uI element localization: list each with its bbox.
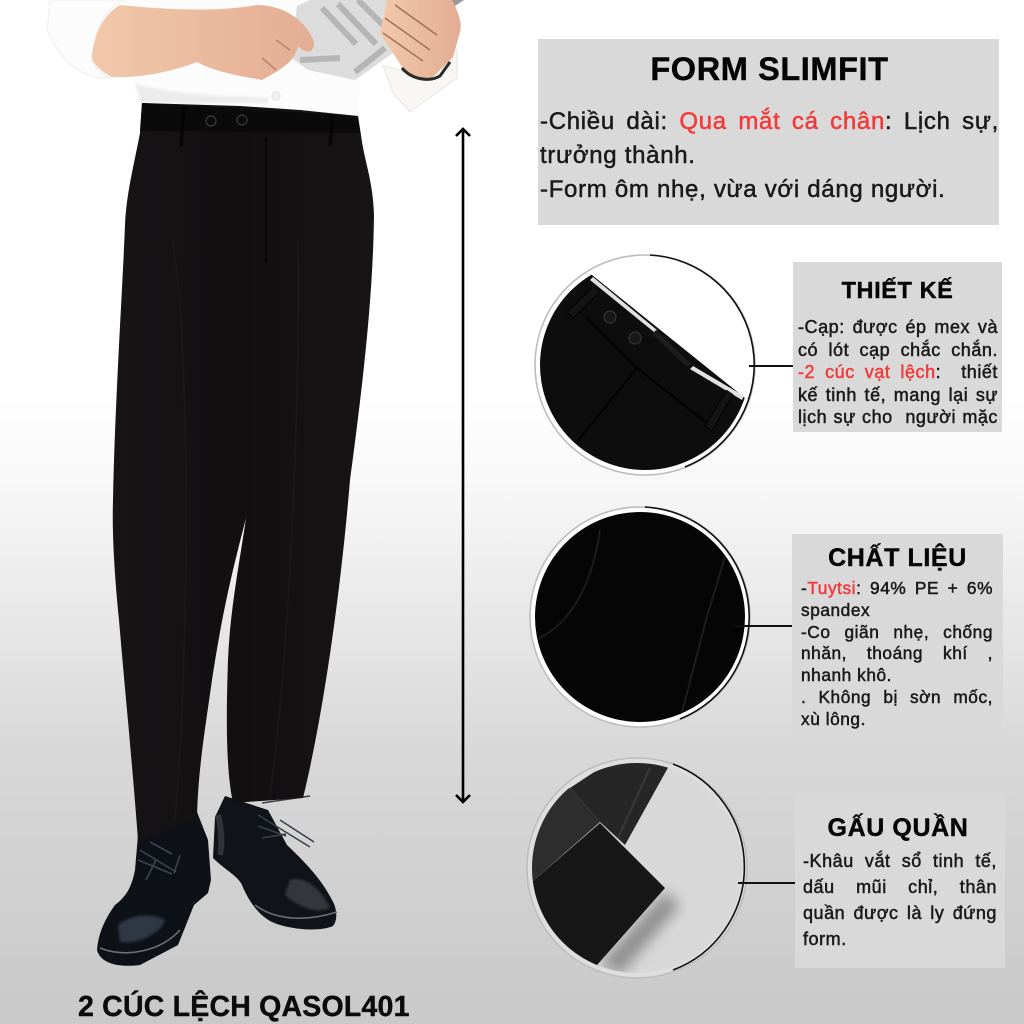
text: material: -Tuytsi: 94% PE + 6%	[801, 578, 993, 598]
text: design: lịch sự cho người mặc	[798, 407, 998, 427]
text: material: xù lông.	[801, 709, 866, 729]
text: material: nhanh khô.	[801, 665, 892, 685]
text: material	[800, 578, 993, 729]
connector: hem	[738, 882, 795, 884]
text: hem detail	[803, 850, 997, 949]
text: material: . Không bị sờn mốc,	[801, 687, 993, 707]
heading: thiet ke: THIẾT KẾ	[842, 277, 953, 303]
detail circle: hem	[526, 757, 748, 978]
text: material: spandex	[801, 600, 870, 620]
left shoe	[97, 812, 211, 966]
text: material: -Co giãn nhẹ, chống	[801, 622, 993, 642]
text: description: -Chiều dài: Qua mắt cá chân: Lịch sự,	[540, 108, 999, 135]
text: design: -2 cúc vạt lệch: thiết	[798, 362, 998, 382]
text: description	[540, 108, 999, 203]
heading: chat lieu: CHẤT LIỆU	[828, 544, 967, 572]
shirt body	[47, 0, 457, 116]
text: design: có lót cạp chắc chắn.	[798, 340, 998, 360]
text: design	[798, 317, 998, 428]
heading: gau quan: GẤU QUẦN	[828, 814, 968, 842]
connector: fabric	[735, 625, 793, 627]
panel: gau quan	[795, 798, 1005, 968]
trousers	[113, 103, 374, 840]
photo: man wearing black slim-fit trousers	[46, 0, 464, 966]
arms and hands	[92, 0, 461, 80]
detail circle: fabric	[529, 506, 751, 728]
text: hem detail: dấu mũi chỉ, thân	[803, 877, 997, 897]
text: design: -Cạp: được ép mex và	[798, 317, 998, 337]
text: description: trưởng thành.	[540, 142, 696, 169]
text: hem detail: form.	[803, 929, 847, 949]
detail circle: waistband	[534, 254, 756, 476]
connector: waistband	[749, 365, 793, 367]
text: design: kế tinh tế, mang lại sự	[798, 385, 998, 405]
panel: chat lieu	[792, 534, 1003, 735]
text: description: -Form ôm nhẹ, vừa với dáng người.	[540, 176, 946, 203]
text: material: nhăn, thoáng khí ,	[801, 643, 993, 663]
panel: thiet ke	[793, 262, 1002, 432]
heading: form slimfit: FORM SLIMFIT	[650, 51, 889, 87]
panel: form slimfit	[538, 39, 999, 225]
newspaper	[290, 0, 464, 80]
text: hem detail: quần được là ly đứng	[803, 903, 997, 923]
product name: 2 CÚC LỆCH QASOL401	[78, 991, 410, 1023]
text: hem detail: -Khâu vắt sổ tinh tế,	[803, 851, 997, 871]
right shoe	[213, 796, 337, 929]
double-headed length arrow	[455, 127, 471, 804]
